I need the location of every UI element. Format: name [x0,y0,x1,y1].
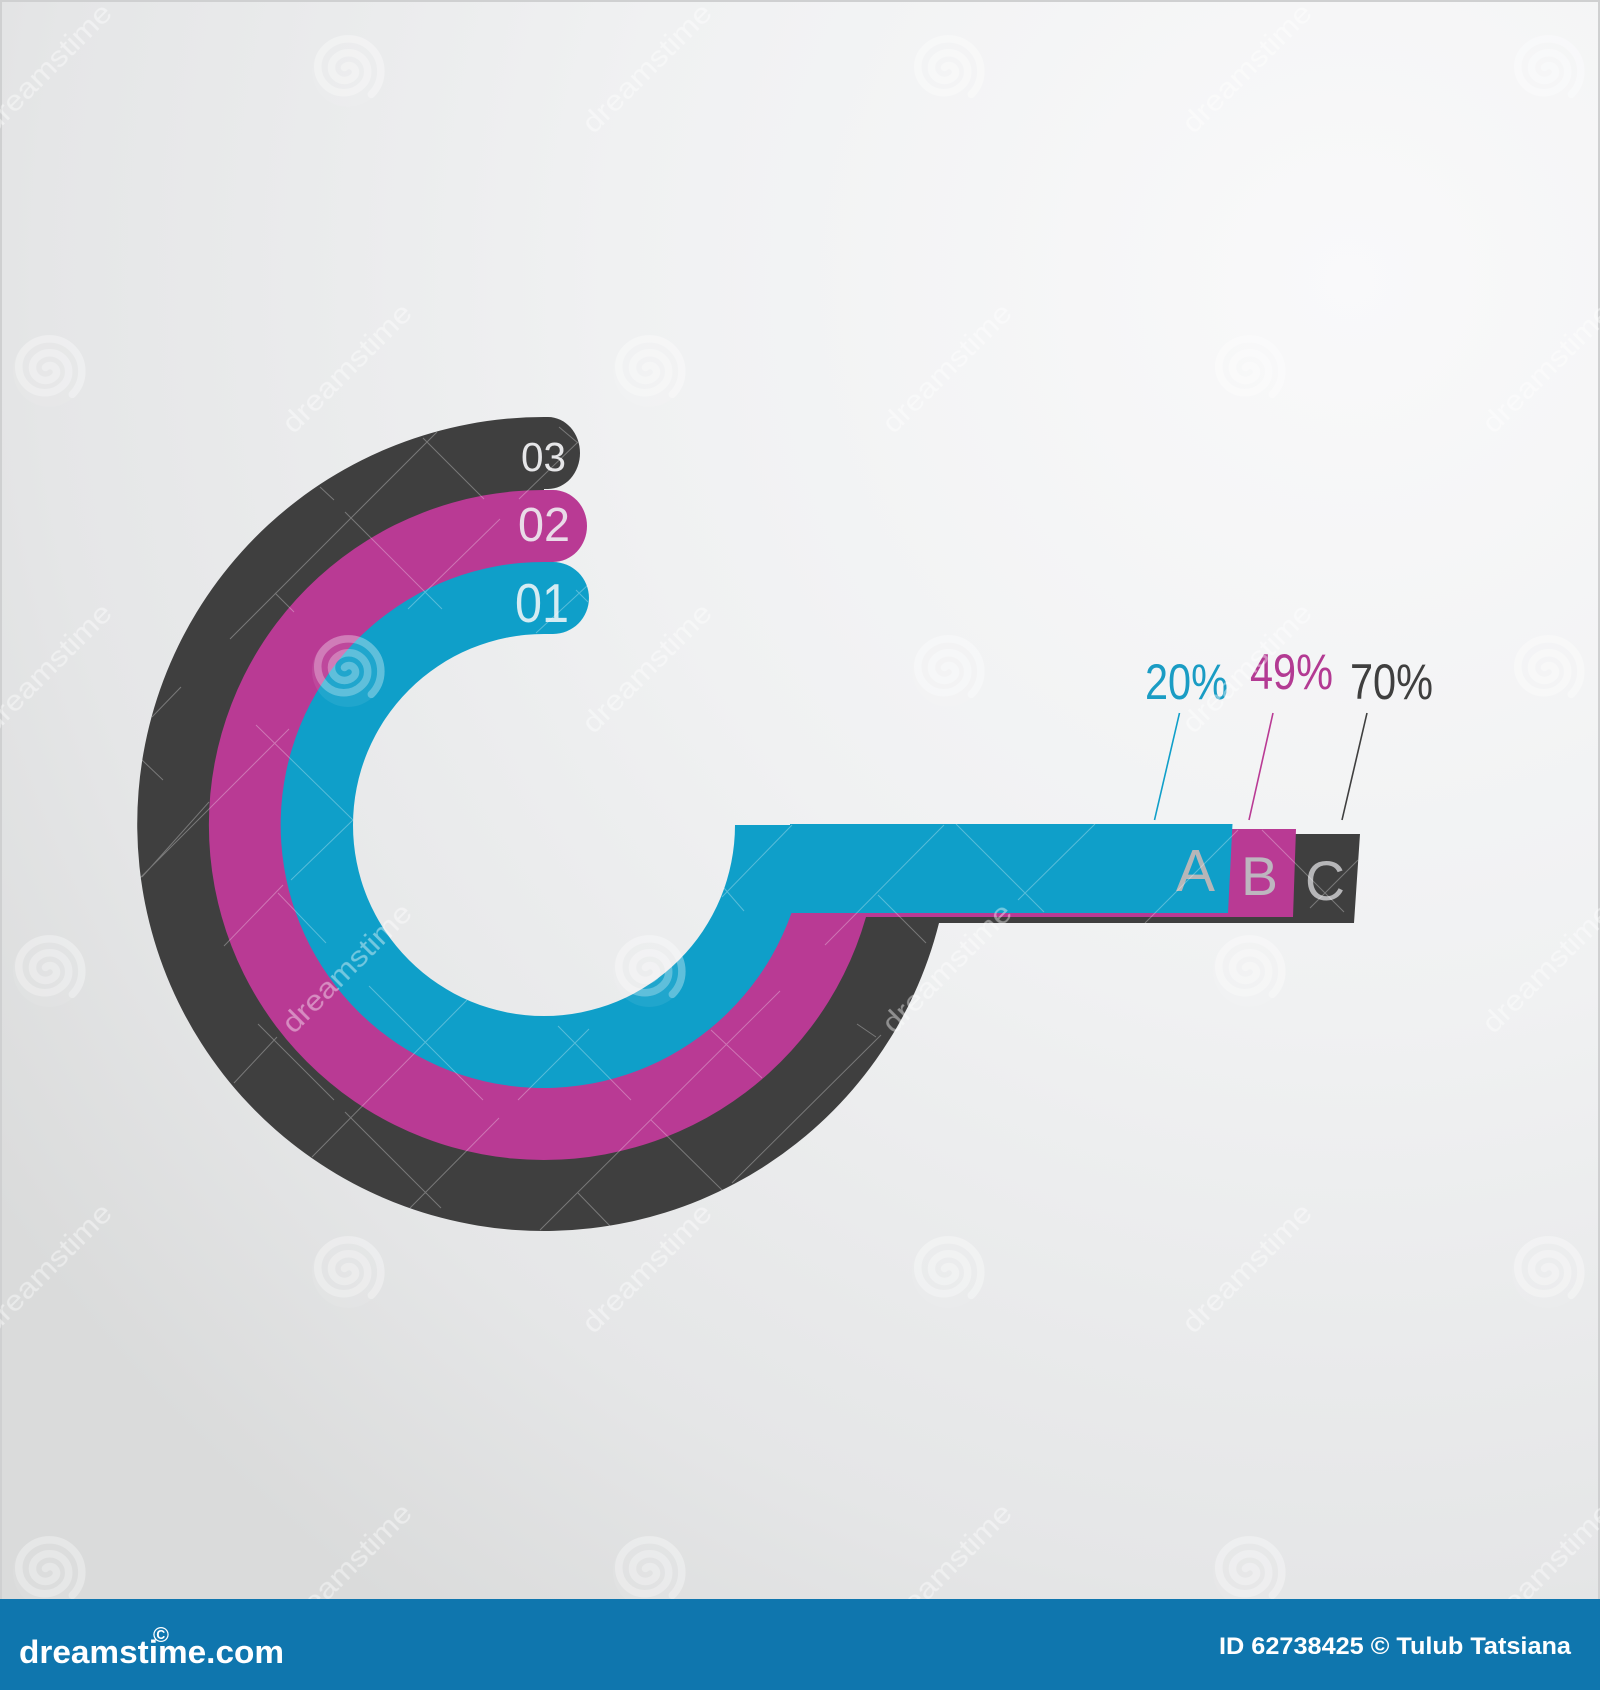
leader line for 70% [1342,713,1367,820]
watermark wordmarks: dreamstime [576,0,719,140]
value 20%: 20% [1145,654,1228,710]
ring number 01: 01 [515,572,569,634]
watermark wordmarks: dreamstime [1176,1197,1319,1340]
watermark wordmarks: dreamstime [576,1197,719,1340]
ring 02: magenta arc and bar B [209,490,1296,1160]
bar letter A: A [1176,838,1216,904]
watermark wordmarks: dreamstime [276,1497,419,1640]
watermark wordmarks: dreamstime [876,897,1019,1040]
footer logo: dreamstime.com [19,1634,284,1670]
watermark wordmarks: dreamstime [276,297,419,440]
ring number 03: 03 [521,434,566,480]
watermark wordmarks: dreamstime [876,297,1019,440]
ring number 02: 02 [518,499,570,552]
watermark diagonal hairlines [140,427,1358,1230]
ring 03: dark arc and bar C [137,417,1360,1231]
leader line for 20% [1154,713,1180,820]
ring 01: blue arc and bar A [281,562,1232,1088]
watermark wordmarks: dreamstime [1176,0,1319,140]
bar letter C: C [1305,849,1345,912]
footer banner [0,1599,1600,1690]
bar letter B: B [1241,845,1278,907]
footer image credit: ID 62738425 © Tulub Tatsiana [1219,1633,1572,1660]
watermark wordmarks: dreamstime [876,1497,1019,1640]
value 49%: 49% [1250,644,1333,700]
watermark wordmarks: dreamstime [276,897,419,1040]
footer logo: © [153,1624,170,1647]
value 70%: 70% [1350,654,1433,710]
watermark wordmarks: dreamstime [1176,597,1319,740]
leader line for 49% [1249,713,1273,820]
watermark wordmarks: dreamstime [576,597,719,740]
